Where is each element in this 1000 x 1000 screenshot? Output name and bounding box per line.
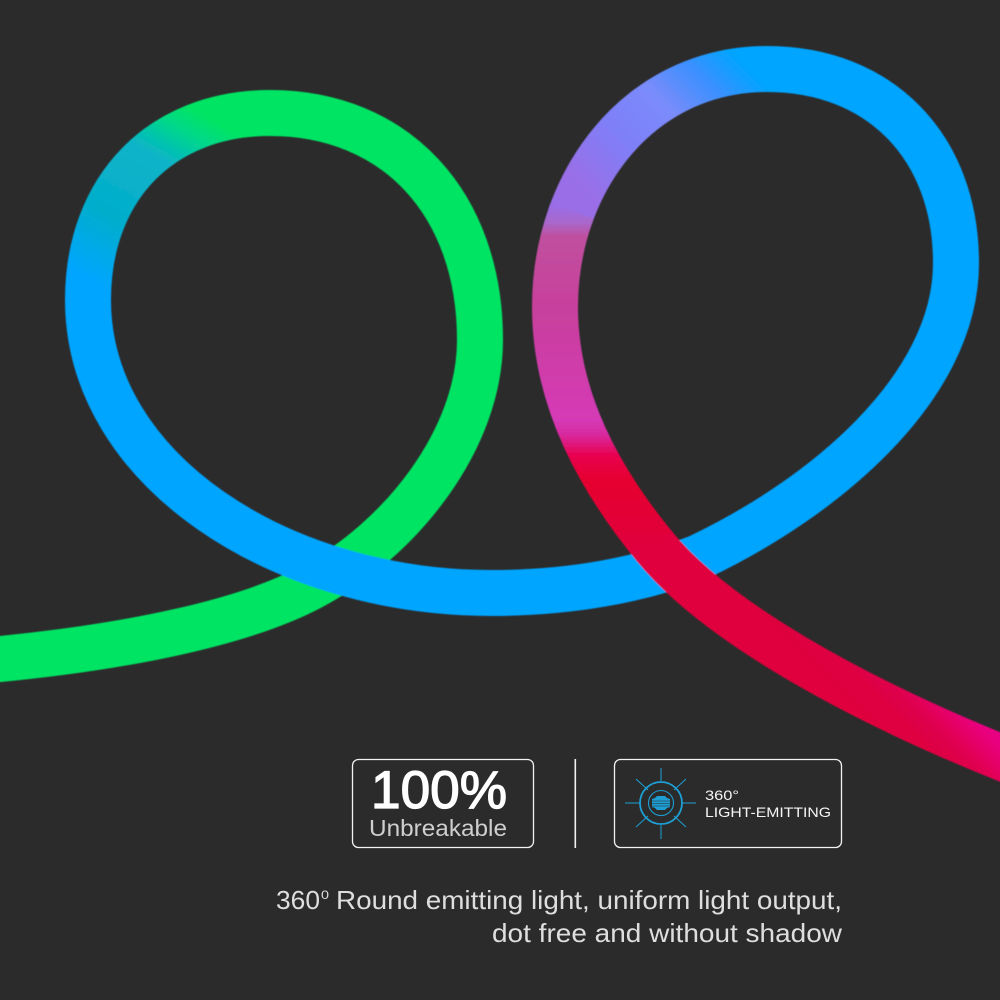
neon strip xyxy=(0,69,1000,761)
icon: light rays circle xyxy=(625,768,696,839)
badge: 360 light-emitting xyxy=(614,760,842,848)
light-emitting label: LIGHT-EMITTING xyxy=(705,804,831,820)
description line 2: dot free and without shadow xyxy=(492,918,842,948)
green section xyxy=(0,113,480,660)
blue section xyxy=(88,69,956,593)
description line 1: Round emitting light, uniform light output, xyxy=(336,885,842,915)
green to blue transition xyxy=(88,113,272,300)
description line 1: 0 xyxy=(321,888,329,902)
purple to pink transition xyxy=(555,211,572,307)
divider xyxy=(574,759,576,848)
blue to purple transition xyxy=(570,69,769,216)
badge: 100% unbreakable xyxy=(352,760,534,848)
description line 1: 360 xyxy=(276,885,320,915)
red tail section xyxy=(654,545,1000,761)
100% figure: 100% xyxy=(371,761,507,820)
pink to red section xyxy=(555,305,655,547)
360 degree label: 360° xyxy=(705,787,739,803)
description text xyxy=(276,885,842,948)
unbreakable label: Unbreakable xyxy=(369,815,507,841)
